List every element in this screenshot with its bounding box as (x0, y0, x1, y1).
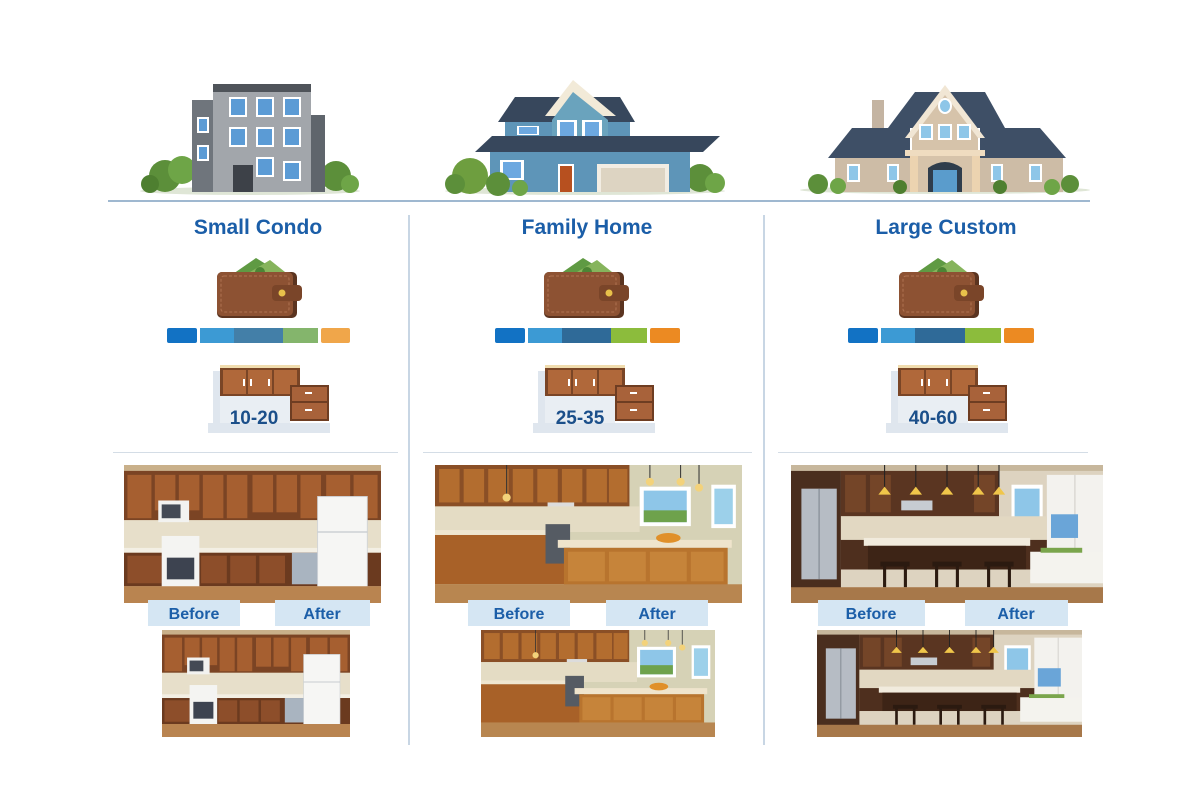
icon: wallet (899, 258, 984, 318)
label: Before (818, 600, 925, 626)
cost bar (495, 328, 680, 343)
kitchen before image (791, 465, 1103, 603)
icon: small condo building (140, 84, 360, 195)
heading: Large Custom: Large Custom (875, 216, 1017, 239)
column: family home (435, 216, 742, 737)
kitchen after image (481, 630, 715, 737)
label: Before: Before (846, 606, 896, 623)
icon: cabinets with count (533, 365, 655, 433)
icon: wallet (544, 258, 629, 318)
cost bar (167, 328, 350, 343)
column: large custom (791, 216, 1103, 737)
label: Before (148, 600, 240, 626)
kitchen before image (435, 465, 742, 603)
kitchen before image (124, 465, 381, 603)
label: After (275, 600, 370, 626)
kitchen after image (817, 630, 1082, 737)
icon: wallet (217, 258, 302, 318)
icon: large custom home (800, 85, 1090, 195)
label: After (606, 600, 708, 626)
heading: Small Condo: Small Condo (194, 216, 322, 239)
label: Before: Before (494, 606, 544, 623)
column: small condo (124, 216, 381, 737)
label: After: After (997, 606, 1035, 623)
label: After: After (638, 606, 676, 623)
heading: Family Home: Family Home (522, 216, 652, 239)
kitchen after image (162, 630, 350, 737)
icon: cabinets with count (208, 365, 330, 433)
icon: family home (445, 80, 725, 196)
icon: cabinets with count: 40-60 (909, 408, 957, 429)
column divider right (763, 215, 765, 745)
label: Before: Before (169, 606, 219, 623)
icon: cabinets with count: 25-35 (556, 408, 605, 429)
label: After: After (303, 606, 341, 623)
header divider line (108, 200, 1090, 202)
icon: cabinets with count: 10-20 (230, 408, 278, 429)
label: After (965, 600, 1068, 626)
section dividers (113, 452, 1088, 453)
cost bar (848, 328, 1034, 343)
label: Before (468, 600, 570, 626)
icon: cabinets with count (886, 365, 1008, 433)
column divider left (408, 215, 410, 745)
